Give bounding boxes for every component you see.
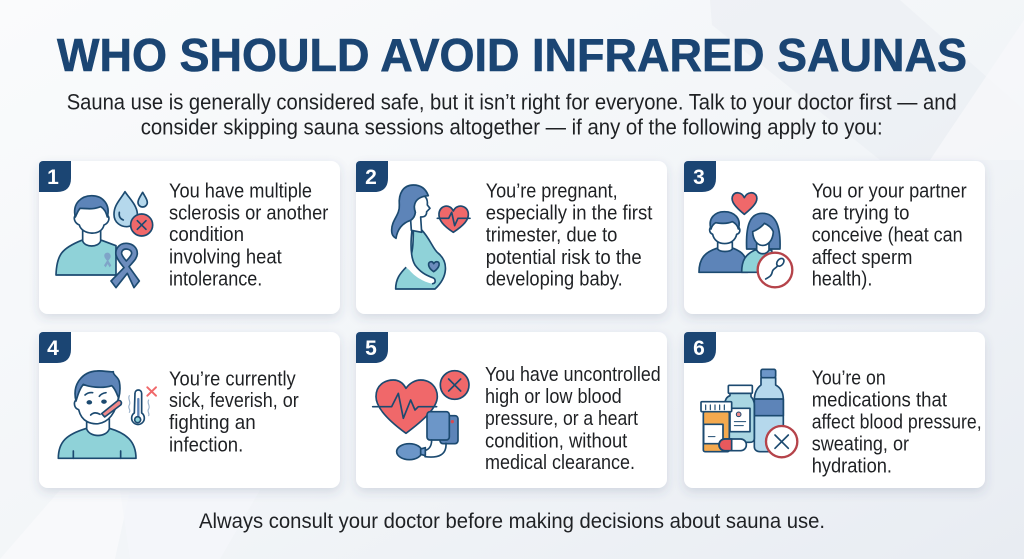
intro text bbox=[67, 89, 957, 140]
text: card 3: conceive (heat can bbox=[812, 224, 963, 247]
text: card 5: pressure, or a heart bbox=[485, 407, 638, 430]
text: card 4: sick, feverish, or bbox=[169, 389, 299, 412]
icon: pregnant woman and heart bbox=[392, 185, 470, 289]
text: card 2 bbox=[486, 180, 653, 291]
intro text: consider skipping sauna sessions altogether — if any of the following apply to you: bbox=[141, 115, 883, 140]
number badge 6: 6 bbox=[693, 337, 705, 360]
number badge 3 bbox=[684, 161, 716, 192]
text: card 5: medical clearance. bbox=[485, 451, 635, 474]
text: card 1: intolerance. bbox=[169, 268, 262, 291]
text: card 4 bbox=[169, 367, 299, 456]
intro text: Sauna use is generally considered safe, but it isn’t right for everyone. Talk to your doctor first — and bbox=[67, 89, 957, 114]
text: card 5: high or low blood bbox=[485, 385, 622, 408]
panel: card 6 medications bbox=[684, 332, 985, 488]
text: card 5 bbox=[485, 363, 661, 474]
number badge 4: 4 bbox=[47, 337, 59, 360]
text: card 1: You have multiple bbox=[169, 180, 312, 203]
text: card 2: especially in the first bbox=[486, 201, 653, 224]
icon: medicine bottles and water bottle bbox=[701, 369, 797, 457]
text: card 2: developing baby. bbox=[486, 268, 623, 291]
text: card 6 bbox=[812, 366, 982, 477]
text: card 3: health). bbox=[812, 268, 872, 291]
icon: heart and blood pressure cuff bbox=[373, 371, 469, 460]
text: card 2: trimester, due to bbox=[486, 224, 617, 247]
panel: card 3 conception bbox=[684, 161, 985, 314]
text: card 6: sweating, or bbox=[812, 433, 909, 456]
text: card 4: fighting an bbox=[169, 411, 256, 434]
icon: couple, heart and sperm symbol bbox=[699, 193, 792, 287]
number badge 5 bbox=[356, 332, 388, 363]
text: card 5: condition, without bbox=[485, 429, 628, 452]
number badge 1 bbox=[39, 161, 71, 192]
text: card 6: hydration. bbox=[812, 454, 892, 477]
text: card 3 bbox=[812, 180, 967, 291]
text: card 3: are trying to bbox=[812, 201, 909, 224]
number badge 1: 1 bbox=[47, 166, 59, 189]
text: card 4: infection. bbox=[169, 433, 243, 456]
panel: card 4 sick or feverish bbox=[39, 332, 340, 488]
panel: card 2 pregnancy bbox=[356, 161, 667, 314]
text: card 2: potential risk to the bbox=[486, 246, 642, 269]
number badge 4 bbox=[39, 332, 71, 363]
text: card 2: You’re pregnant, bbox=[486, 180, 618, 203]
text: card 6: You’re on bbox=[812, 366, 886, 389]
text: card 1: sclerosis or another bbox=[169, 201, 328, 224]
text: card 3: affect sperm bbox=[812, 246, 912, 269]
icon: person with ribbon and water drops bbox=[56, 192, 153, 288]
title: WHO SHOULD AVOID INFRARED SAUNAS bbox=[57, 29, 967, 81]
text: card 1: involving heat bbox=[169, 245, 282, 268]
text: card 1: condition bbox=[169, 223, 244, 246]
footer note: Always consult your doctor before making decisions about sauna use. bbox=[199, 509, 825, 533]
panel: card 5 blood pressure bbox=[356, 332, 667, 488]
panel: card 1 multiple sclerosis bbox=[39, 161, 340, 314]
text: card 3: You or your partner bbox=[812, 180, 967, 203]
number badge 2: 2 bbox=[365, 166, 377, 189]
number badge 6 bbox=[684, 332, 716, 363]
text: card 6: medications that bbox=[812, 388, 947, 411]
number badge 2 bbox=[356, 161, 388, 192]
text: card 1 bbox=[169, 180, 328, 291]
number badge 5: 5 bbox=[365, 337, 377, 360]
text: card 4: You’re currently bbox=[169, 367, 296, 390]
number badge 3: 3 bbox=[693, 166, 705, 189]
text: card 5: You have uncontrolled bbox=[485, 363, 661, 386]
icon: sick person with thermometer bbox=[58, 371, 156, 458]
text: card 6: affect blood pressure, bbox=[812, 410, 982, 433]
